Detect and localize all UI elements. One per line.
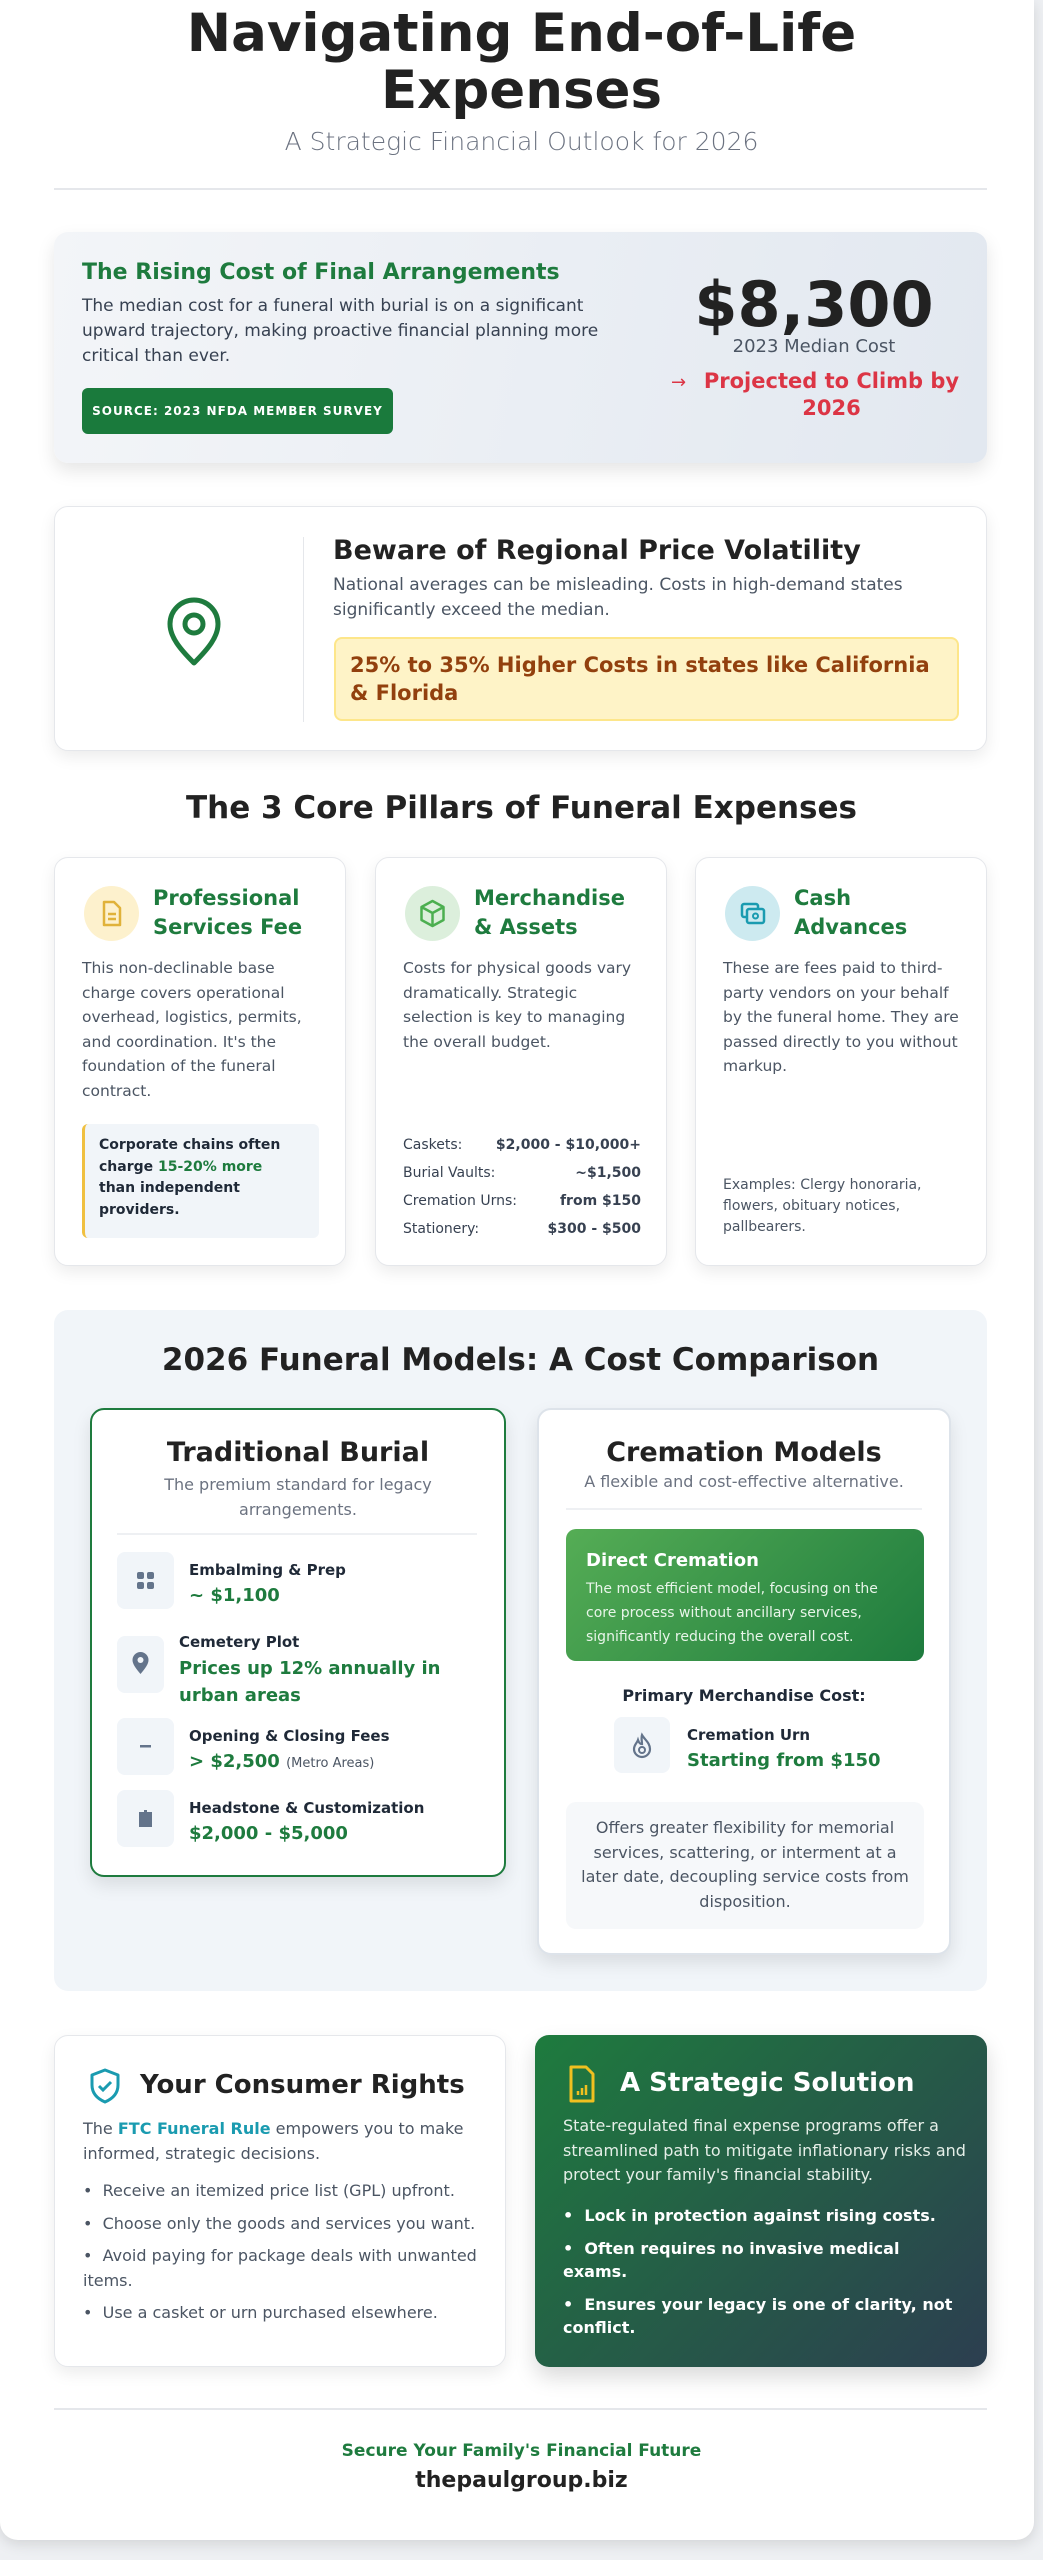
price list: Stationery: bbox=[403, 1221, 479, 1237]
panel: merchandise bbox=[375, 857, 667, 1266]
item: opening closing: > $2,500 (Metro Areas) bbox=[189, 1751, 374, 1772]
rights list: • Choose only the goods and services you want. bbox=[83, 2214, 475, 2232]
panel: professional services bbox=[54, 857, 346, 1266]
item: urn bbox=[614, 1717, 881, 1773]
rights list: • Receive an itemized price list (GPL) upfront. bbox=[83, 2181, 455, 2200]
panel: cost comparison bbox=[54, 1310, 987, 1991]
examples: Examples: Clergy honoraria, flowers, obituary notices, pallbearers. bbox=[723, 1177, 922, 1235]
pillar heading: Services Fee bbox=[153, 915, 302, 939]
item: embalming: ~ $1,100 bbox=[189, 1585, 280, 1606]
pillar heading: Cash bbox=[794, 886, 851, 910]
title bbox=[187, 3, 856, 121]
card: cremation models: A flexible and cost-effective alternative. bbox=[584, 1472, 904, 1491]
direct cremation box: The most efficient model, focusing on the core process without ancillary services, significantly reducing the overall cost. bbox=[586, 1581, 878, 1645]
flexibility note bbox=[566, 1802, 924, 1929]
title: Expenses bbox=[381, 60, 662, 121]
price list: $300 - $500 bbox=[548, 1221, 641, 1237]
rights text: The FTC Funeral Rule empowers you to make informed, strategic decisions. bbox=[83, 2119, 464, 2162]
solution list: • Lock in protection against rising costs. bbox=[563, 2206, 936, 2225]
price list: Burial Vaults: bbox=[403, 1165, 495, 1181]
item: headstone bbox=[117, 1790, 424, 1847]
item: opening closing: Opening & Closing Fees bbox=[189, 1727, 390, 1745]
item: cemetery plot bbox=[117, 1633, 440, 1706]
subtitle: A Strategic Financial Outlook for 2026 bbox=[285, 127, 758, 156]
heading: pillars: The 3 Core Pillars of Funeral Expenses bbox=[186, 790, 857, 826]
card: cremation models bbox=[537, 1408, 951, 1955]
pillar heading: Advances bbox=[794, 915, 907, 939]
callout: corporate chains bbox=[82, 1124, 319, 1238]
rights list: • Avoid paying for package deals with unwanted items. bbox=[83, 2246, 477, 2290]
card: traditional burial: Traditional Burial bbox=[167, 1437, 429, 1468]
footer tagline: Secure Your Family's Financial Future bbox=[342, 2441, 701, 2461]
price list bbox=[403, 1137, 641, 1237]
hero text: The median cost for a funeral with burial is on a significant upward trajectory, making proactive financial planning more critical than ever. bbox=[82, 296, 598, 366]
pillar heading: Professional bbox=[153, 886, 300, 910]
price list: ~$1,500 bbox=[575, 1165, 641, 1181]
stat label: 2023 Median Cost bbox=[733, 336, 895, 357]
direct cremation box bbox=[566, 1529, 924, 1661]
highlight callout bbox=[334, 637, 959, 721]
card: cremation models: Cremation Models bbox=[606, 1437, 882, 1468]
panel: regional volatility bbox=[54, 506, 987, 751]
merchandise label: Primary Merchandise Cost: bbox=[622, 1686, 866, 1705]
rights list bbox=[83, 2181, 477, 2322]
title: Navigating End-of-Life bbox=[187, 3, 856, 64]
projection arrow: → bbox=[671, 372, 686, 393]
solution list bbox=[563, 2206, 952, 2337]
card: traditional burial bbox=[90, 1408, 506, 1877]
hero heading: The Rising Cost of Final Arrangements bbox=[82, 260, 560, 285]
icon: shield bbox=[90, 2068, 120, 2104]
source badge: SOURCE: 2023 NFDA MEMBER SURVEY bbox=[92, 404, 383, 418]
pillar heading bbox=[474, 886, 625, 939]
item: urn: Cremation Urn bbox=[687, 1726, 810, 1744]
source badge bbox=[82, 388, 393, 434]
item: urn: Starting from $150 bbox=[687, 1750, 881, 1771]
pillar text: These are fees paid to third-party vendors on your behalf by the funeral home. They are passed directly to you without markup. bbox=[723, 959, 959, 1075]
icon: map pin bbox=[168, 598, 220, 666]
solution heading: A Strategic Solution bbox=[620, 2068, 914, 2098]
regional text: National averages can be misleading. Costs in high-demand states significantly exceed the median. bbox=[333, 575, 903, 620]
icon: cash bbox=[725, 886, 780, 941]
pillar heading bbox=[794, 886, 907, 939]
panel: consumer rights bbox=[54, 2035, 506, 2367]
pillar text: Costs for physical goods vary dramatically. Strategic selection is key to managing the overall budget. bbox=[403, 959, 631, 1050]
panel: cash advances bbox=[695, 857, 987, 1266]
panel: rising cost hero bbox=[54, 232, 987, 463]
item: opening closing bbox=[117, 1718, 390, 1775]
solution list: • Often requires no invasive medical exams. bbox=[563, 2238, 899, 2281]
highlight callout: 25% to 35% Higher Costs in states like California & Florida bbox=[350, 653, 930, 705]
price list: Cremation Urns: bbox=[403, 1193, 517, 1209]
pillar text: This non-declinable base charge covers operational overhead, logistics, permits, and coordination. It's the foundation of the funeral contract. bbox=[82, 959, 302, 1100]
flexibility note: Offers greater flexibility for memorial services, scattering, or interment at a later date, decoupling service costs from disposition. bbox=[581, 1818, 909, 1910]
regional heading: Beware of Regional Price Volatility bbox=[333, 535, 861, 566]
pillar heading: Merchandise bbox=[474, 886, 625, 910]
item: cemetery plot: Cemetery Plot bbox=[179, 1633, 299, 1651]
big stat: $8,300 bbox=[694, 268, 934, 341]
callout: corporate chains: Corporate chains often charge 15-20% more than independent providers. bbox=[99, 1137, 280, 1218]
item: headstone: Headstone & Customization bbox=[189, 1799, 424, 1817]
item: embalming: Embalming & Prep bbox=[189, 1561, 346, 1579]
solution text: State-regulated final expense programs offer a streamlined path to mitigate inflationary risks and protect your family's financial stability. bbox=[563, 2116, 966, 2184]
solution list: • Ensures your legacy is one of clarity, not conflict. bbox=[563, 2294, 952, 2337]
icon: document bbox=[84, 886, 139, 941]
rights heading: Your Consumer Rights bbox=[140, 2070, 465, 2100]
item: cemetery plot: Prices up 12% annually in urban areas bbox=[179, 1658, 440, 1706]
pillar heading: & Assets bbox=[474, 915, 578, 939]
pillar heading bbox=[153, 886, 302, 939]
comparison heading: 2026 Funeral Models: A Cost Comparison bbox=[162, 1342, 879, 1378]
card: traditional burial: The premium standard for legacy arrangements. bbox=[164, 1475, 432, 1519]
rights list: • Use a casket or urn purchased elsewhere. bbox=[83, 2303, 438, 2322]
footer url: thepaulgroup.biz bbox=[415, 2468, 628, 2493]
icon: chart document bbox=[570, 2066, 594, 2102]
direct cremation box: Direct Cremation bbox=[586, 1550, 759, 1571]
icon: box bbox=[405, 886, 460, 941]
item: headstone: $2,000 - $5,000 bbox=[189, 1823, 348, 1844]
projection: Projected to Climb by 2026 bbox=[704, 369, 959, 420]
panel: strategic solution bbox=[535, 2035, 987, 2367]
item: embalming bbox=[117, 1552, 346, 1609]
price list: $2,000 - $10,000+ bbox=[496, 1137, 641, 1153]
price list: Caskets: bbox=[403, 1137, 462, 1153]
price list: from $150 bbox=[560, 1193, 641, 1209]
